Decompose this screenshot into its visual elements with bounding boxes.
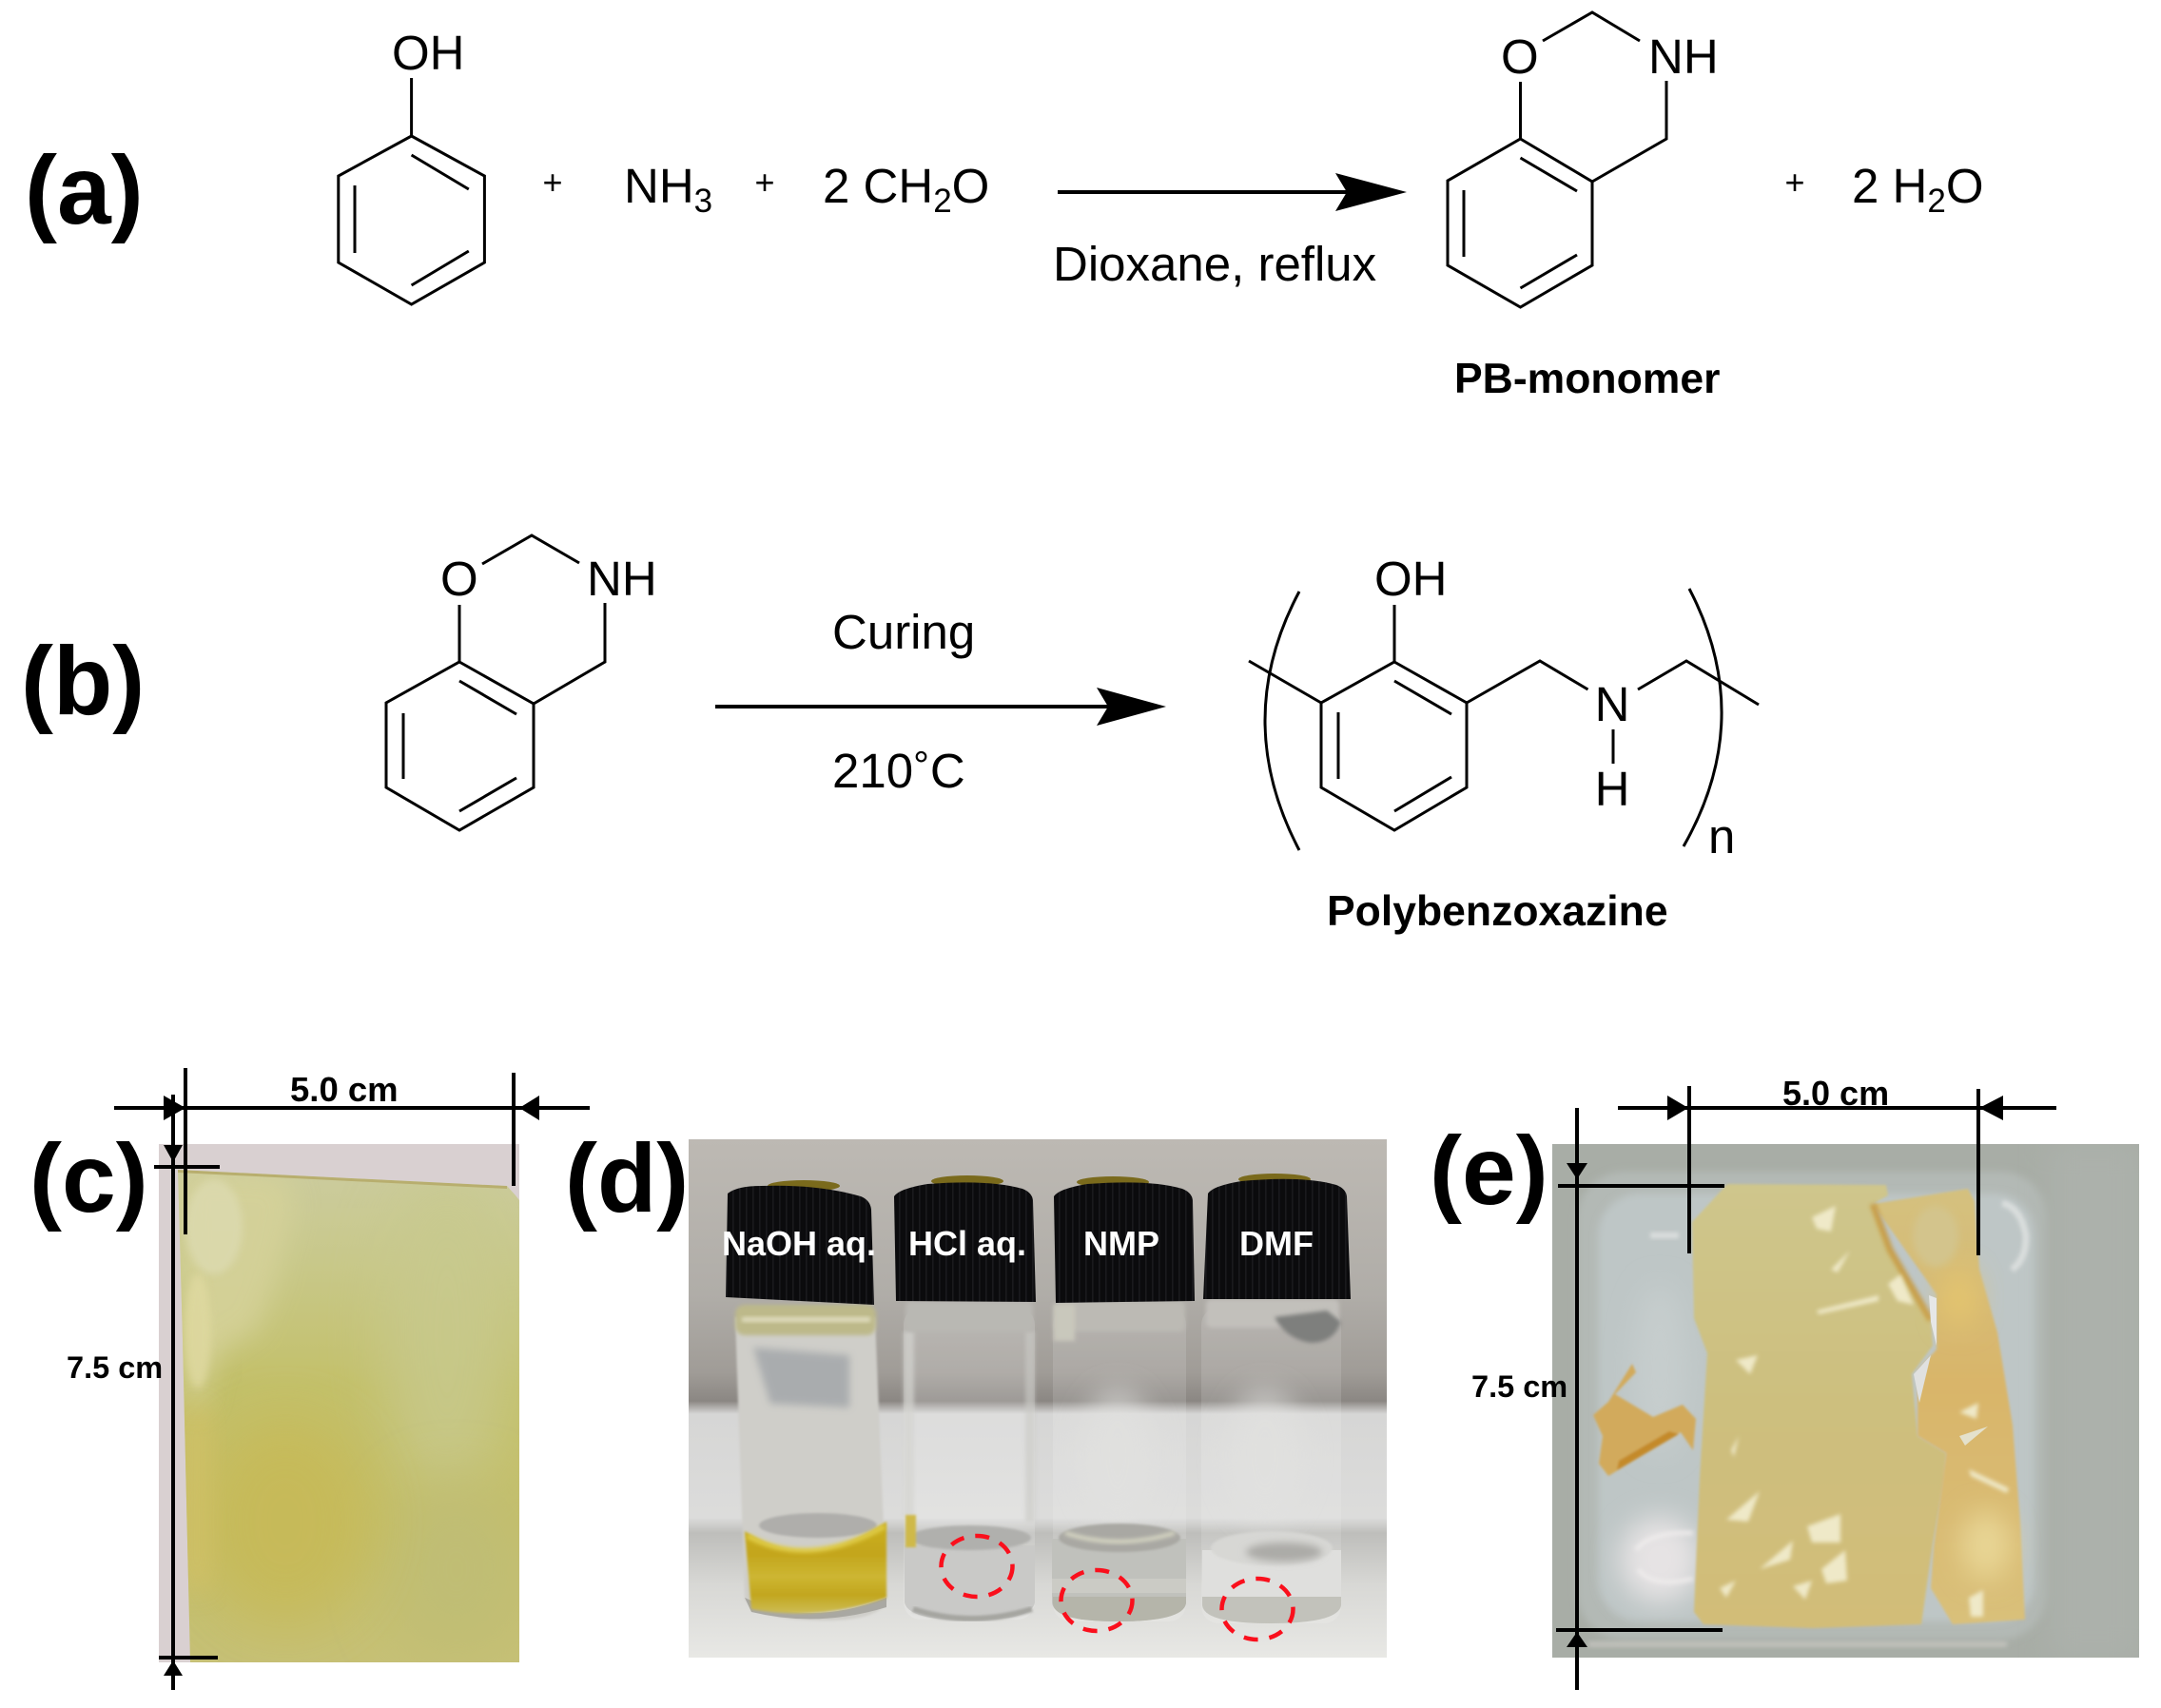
plus sign: + bbox=[542, 163, 563, 202]
panel a: monomer synthesis reaction bbox=[25, 12, 1984, 402]
molecule: phenol: OH bbox=[392, 26, 464, 80]
label d: (d) bbox=[565, 1124, 689, 1232]
plus sign: + bbox=[1784, 163, 1805, 202]
vial labels: HCl aq. bbox=[908, 1224, 1026, 1263]
molecule: monomer: O bbox=[440, 552, 478, 606]
width dimension 5.0 cm bbox=[114, 1068, 590, 1234]
curing temperature: C bbox=[930, 744, 965, 798]
compound name: PB-monomer: PB-monomer bbox=[1454, 356, 1720, 402]
white reflections on film bbox=[1720, 1206, 2009, 1617]
plus sign: + bbox=[754, 163, 775, 202]
curing temperature: ° bbox=[913, 743, 929, 787]
molecule: polybenzoxazine bbox=[1249, 552, 1759, 864]
vial 2: HCl bbox=[904, 1301, 1035, 1621]
red dashed circles marking film residue bbox=[942, 1536, 1294, 1640]
curing condition: Curing bbox=[832, 605, 975, 659]
photo: yellow polymer sheet bbox=[159, 1144, 523, 1664]
vial 3: NMP bbox=[1052, 1301, 1186, 1621]
height dimension 7.5 cm: 7.5 cm bbox=[1471, 1369, 1567, 1404]
reaction arrow bbox=[1058, 173, 1407, 211]
reaction arrow bbox=[715, 688, 1166, 726]
reagent: ammonia: 3 bbox=[694, 183, 712, 220]
molecule: PB monomer: O bbox=[1501, 29, 1539, 84]
vial 4: DMF bbox=[1201, 1299, 1341, 1623]
panel d: solvent resistance vial photo bbox=[565, 1124, 1387, 1658]
vial 1: NaOH bbox=[735, 1305, 886, 1621]
reagent: formaldehyde: O bbox=[952, 159, 989, 213]
molecule: polybenzoxazine: n bbox=[1708, 809, 1735, 864]
photo: film in glass dish bbox=[1552, 1144, 2139, 1658]
panel b: curing reaction bbox=[21, 535, 1759, 935]
vial labels: NMP bbox=[1083, 1224, 1159, 1263]
label c: (c) bbox=[29, 1124, 148, 1232]
vial labels bbox=[722, 1224, 1314, 1263]
vial labels: DMF bbox=[1239, 1224, 1314, 1263]
film: second sheet bbox=[1873, 1189, 2025, 1624]
molecule: polybenzoxazine: N bbox=[1595, 677, 1629, 731]
panel c: cured film photo with dimensions bbox=[29, 1068, 590, 1690]
panel e: swollen film photo with dimensions bbox=[1430, 1074, 2139, 1690]
molecule: PB monomer: NH bbox=[1648, 29, 1719, 84]
label a: (a) bbox=[25, 136, 144, 244]
bottle caps bbox=[726, 1174, 1351, 1305]
molecule: phenol bbox=[339, 26, 484, 304]
label e: (e) bbox=[1430, 1116, 1548, 1225]
product: water: O bbox=[1946, 159, 1984, 213]
photo: four vials bbox=[689, 1139, 1387, 1658]
film fragment bbox=[1593, 1364, 1696, 1476]
height dimension 7.5 cm bbox=[67, 1095, 220, 1690]
film: main sheet bbox=[1692, 1184, 1946, 1628]
molecule: polybenzoxazine: H bbox=[1595, 762, 1629, 816]
curing temperature: 210 bbox=[832, 744, 913, 798]
height dimension 7.5 cm bbox=[1471, 1108, 1724, 1690]
molecule: polybenzoxazine: OH bbox=[1374, 552, 1448, 606]
width dimension 5.0 cm: 5.0 cm bbox=[290, 1070, 399, 1109]
reagent: formaldehyde: 2 CH bbox=[823, 159, 933, 213]
product: water: 2 H bbox=[1852, 159, 1927, 213]
product: water: 2 bbox=[1927, 183, 1946, 220]
height dimension 7.5 cm: 7.5 cm bbox=[67, 1350, 163, 1385]
molecule: PB monomer bbox=[1448, 12, 1719, 307]
width dimension 5.0 cm: 5.0 cm bbox=[1782, 1074, 1889, 1113]
compound name: Polybenzoxazine: Polybenzoxazine bbox=[1327, 888, 1668, 935]
reagent: ammonia: NH bbox=[624, 159, 694, 213]
molecule: monomer: NH bbox=[587, 552, 657, 606]
molecule: monomer bbox=[386, 535, 657, 830]
label b: (b) bbox=[21, 627, 145, 735]
reaction condition: Dioxane, reflux bbox=[1053, 237, 1376, 291]
reagent: formaldehyde: 2 bbox=[933, 183, 952, 220]
width dimension 5.0 cm bbox=[1618, 1074, 2056, 1255]
vial labels: NaOH aq. bbox=[722, 1224, 876, 1263]
